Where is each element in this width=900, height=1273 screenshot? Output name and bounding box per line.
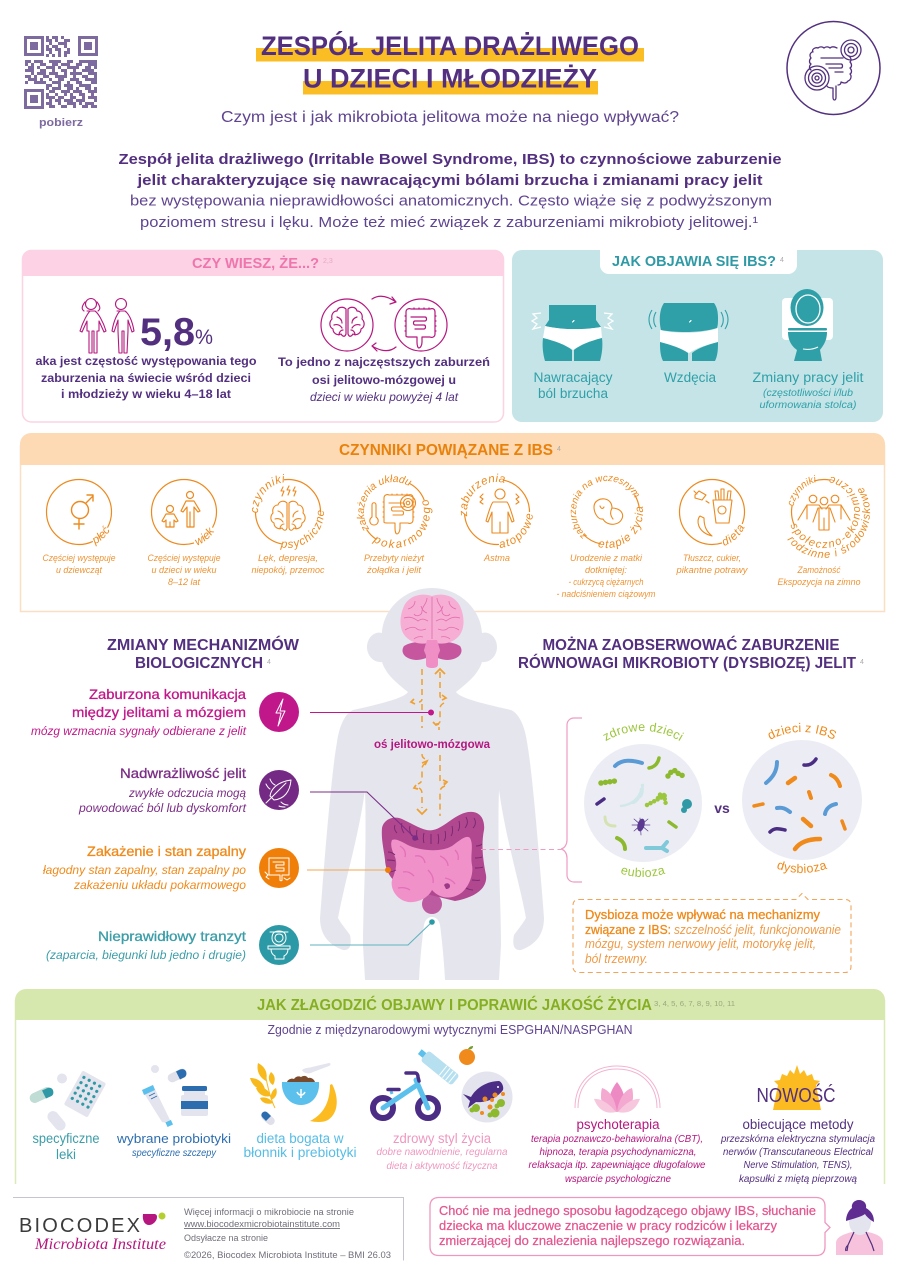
- item: psychotherapy: relaksacja itp. zapewniające długofalowe: [528, 1160, 706, 1171]
- statistic description: i młodzieży w wieku 4–18 lat: [61, 387, 231, 401]
- heading: dysbiosis: 4: [860, 659, 864, 666]
- mechanism: infection and inflammation: zakażeniu układu pokarmowego: [73, 880, 247, 892]
- factor captions: niepokój, przemoc: [252, 565, 325, 576]
- intro paragraph: [118, 151, 782, 231]
- factor: socio-economic: czynniki: [788, 474, 816, 506]
- factor: gastrointestinal infection: [356, 474, 432, 548]
- item: healthy lifestyle: dobre nawodnienie, regularna: [376, 1147, 508, 1158]
- item: specific drugs: specyficzne: [32, 1131, 100, 1146]
- closing callout: Choć nie ma jednego sposobu łagodzącego objawy IBS, słuchanie: [439, 1204, 816, 1218]
- heading: dysbiosis: [518, 636, 864, 672]
- mechanism: abnormal transit: [46, 919, 435, 965]
- factor: early life disturbances: etapie życia: [598, 506, 644, 550]
- mechanism: abnormal transit: (zaparcia, biegunki lub jedno i drugie): [46, 950, 246, 962]
- factor captions: - nadciśnieniem ciążowym: [556, 589, 656, 600]
- item: healthy lifestyle: [376, 1131, 508, 1172]
- title: U DZIECI I MŁODZIEŻY: [303, 64, 597, 94]
- factor captions: Urodzenie z matki: [570, 553, 643, 564]
- closing callout: dziecka ma kluczowe znaczenie w pracy rodziców i lekarzy: [439, 1219, 778, 1233]
- factor captions: Częściej występuje: [148, 553, 220, 564]
- title: ZESPÓŁ JELITA DRAŻLIWEGO: [261, 30, 639, 61]
- factor captions: Ekspozycja na zimno: [778, 577, 860, 588]
- factor captions: 8–12 lat: [168, 577, 200, 588]
- mechanism: visceral hypersensitivity: [78, 765, 418, 841]
- item: promising methods: Nerve Stimulation, TENS),: [744, 1160, 852, 1171]
- intro paragraph: bez występowania nieprawidłowości anatomicznych. Często wiąże się z podwyższonym: [130, 192, 772, 210]
- factor: psychological: [252, 474, 324, 550]
- symptom labels: Wzdęcia: [664, 370, 716, 385]
- mechanism: infection and inflammation: [43, 843, 391, 892]
- axis description: dzieci w wieku powyżej 4 lat: [310, 390, 459, 404]
- icon: toilet: [782, 289, 833, 361]
- item: promising methods: kapsułki z miętą pieprzową: [739, 1174, 857, 1185]
- icon: abdominal pain: [532, 305, 613, 361]
- factor: atopic disorders: zaburzenia: [460, 474, 505, 516]
- heading: biological mechanisms: [107, 636, 299, 672]
- bacteria dysbiosis: [754, 759, 845, 849]
- factor: atopic disorders: [460, 474, 533, 548]
- factor: age: wiek: [194, 527, 214, 546]
- factor captions: [42, 553, 860, 600]
- axis label: oś jelitowo-mózgowa: [374, 739, 491, 751]
- closing callout: zmierzającej do znalezienia najlepszego rozwiązania.: [439, 1234, 745, 1248]
- item: diet rich in fibre: błonnik i prebiotyki: [244, 1145, 356, 1160]
- symptom labels: ból brzucha: [538, 386, 608, 401]
- statistic description: zaburzenia na świecie wśród dzieci: [41, 371, 251, 385]
- panel heading: CZYNNIKI POWIĄZANE Z IBS: [339, 442, 553, 459]
- statistic 5,8%: 5,8: [140, 311, 195, 354]
- statistic 5,8%: %: [195, 326, 213, 349]
- factor: early life disturbances: zaburzenia na wczesnym: [570, 476, 639, 539]
- factor: age: [150, 478, 218, 546]
- footer info: [13, 1198, 404, 1260]
- logo: Biocodex: BIOCODEX: [19, 1215, 140, 1237]
- icon: doctor: [836, 1200, 883, 1255]
- dysbiosis callout: Dysbioza może wpływać na mechanizmy: [585, 908, 821, 922]
- item: psychotherapy: terapia poznawczo-behawioralna (CBT),: [531, 1134, 703, 1145]
- factor captions: Przebyty nieżyt: [364, 553, 424, 564]
- factor captions: dotkniętej:: [585, 565, 627, 576]
- footer text: www.biocodexmicrobiotainstitute.com: [183, 1219, 340, 1229]
- factor: gastrointestinal infection: pokarmowego: [372, 500, 432, 548]
- dysbiosis callout: szczelność jelit, funkcjonowanie: [674, 923, 841, 937]
- item: specific drugs: leki: [56, 1147, 76, 1162]
- mechanism: communication: między jelitami a mózgiem: [72, 704, 246, 720]
- mechanism: visceral hypersensitivity: Nadwrażliwość jelit: [120, 765, 246, 781]
- item: promising methods: przezskórna elektryczna stymulacja: [720, 1134, 875, 1145]
- mechanism: communication: mózg wzmacnia sygnały odbierane z jelit: [31, 726, 247, 738]
- panel heading: CZY WIESZ, ŻE...?: [192, 255, 319, 272]
- factor: diet: [678, 478, 746, 546]
- factor captions: u dziewcząt: [56, 565, 102, 576]
- panel: symptoms: [512, 250, 883, 422]
- item: promising methods: obiecujące metody: [742, 1117, 854, 1132]
- bracket: [561, 718, 582, 882]
- factor: psychological: czynniki: [252, 474, 284, 513]
- icon: diet: [250, 1063, 337, 1127]
- label: healthy children: zdrowe dzieci: [603, 722, 684, 741]
- intro paragraph: poziomem stresu i lęku. Może też mieć związek z zaburzeniami mikrobioty jelitowej.¹: [140, 214, 758, 231]
- item: healthy lifestyle: dieta i aktywność fizyczna: [386, 1161, 498, 1172]
- qr code: [25, 38, 97, 108]
- references: 3, 4, 5, 6, 7, 8, 9, 10, 11: [654, 1001, 735, 1008]
- factor: atopic disorders: atopowe: [500, 514, 533, 548]
- icon: brain: [400, 595, 464, 668]
- item: psychotherapy: wsparcie psychologiczne: [565, 1174, 671, 1185]
- footer text: Więcej informacji o mikrobiocie na stronie: [184, 1207, 354, 1217]
- panel: related factors: [20, 433, 886, 612]
- link from gut to microbiota: [481, 848, 561, 850]
- label: dysbiosis: dysbioza: [777, 861, 828, 874]
- factor captions: pikantne potrawy: [676, 565, 749, 576]
- statistic description: aka jest częstość występowania tego: [36, 354, 256, 368]
- item: promising methods: nerwów (Transcutaneous Electrical: [723, 1147, 874, 1158]
- factor captions: Zamożność: [797, 565, 841, 576]
- icon: two children: [80, 298, 134, 353]
- title: [256, 30, 644, 94]
- item: healthy lifestyle: zdrowy styl życia: [393, 1131, 491, 1146]
- factor: psychological: psychiczne: [280, 510, 324, 550]
- axis description: osi jelitowo-mózgowej u: [312, 373, 456, 387]
- icon: intestine with pain circles: [787, 22, 880, 114]
- vs: vs: [714, 800, 730, 816]
- dysbiosis callout: związane z IBS:: [585, 923, 671, 937]
- mechanism: visceral hypersensitivity: zwykłe odczucia mogą: [128, 788, 246, 800]
- gut-brain axis arrows: [411, 669, 447, 816]
- mechanism: abnormal transit: Nieprawidłowy tranzyt: [98, 928, 246, 944]
- closing callout: [430, 1198, 830, 1256]
- factor: diet: dieta: [722, 525, 744, 546]
- heading: biological mechanisms: BIOLOGICZNYCH: [135, 655, 263, 672]
- guidelines note: Zgodnie z międzynarodowymi wytycznymi ESPGHAN/NASPGHAN: [268, 1023, 632, 1037]
- icon: pills: [28, 1070, 106, 1133]
- dysbiosis callout: [573, 894, 851, 972]
- factor captions: Tłuszcz, cukier,: [683, 553, 741, 564]
- axis description: To jedno z najczęstszych zaburzeń: [278, 355, 490, 369]
- mechanism: infection and inflammation: Zakażenie i stan zapalny: [87, 843, 246, 859]
- dysbiosis callout: mózgu, system nerwowy jelit, motorykę jelit,: [585, 937, 816, 951]
- factor captions: Astma: [483, 553, 510, 564]
- intro paragraph: jelit charakteryzujące się nawracającymi bólami brzucha i zmianami pracy jelit: [136, 172, 763, 189]
- item: promising methods: [720, 1117, 875, 1185]
- statistic description: [36, 354, 256, 401]
- label: eubiosis: eubioza: [621, 868, 666, 877]
- footer text: [183, 1207, 391, 1260]
- item: diet rich in fibre: [244, 1131, 356, 1160]
- footer text: Odsyłacze na stronie: [184, 1233, 268, 1243]
- item: selected probiotics: specyficzne szczepy: [132, 1148, 217, 1159]
- icon: probiotics: [142, 1065, 208, 1127]
- symptom labels: uformowania stolca): [760, 400, 856, 411]
- panel: did you know: [22, 250, 504, 422]
- icon: bicycle, bottle and plate: [373, 1046, 512, 1122]
- bacteria healthy: [597, 758, 692, 851]
- intro paragraph: Zespół jelita drażliwego (Irritable Bowel Syndrome, IBS) to czynnościowe zaburzenie: [118, 151, 782, 168]
- heading: dysbiosis: RÓWNOWAGI MIKROBIOTY (DYSBIOZĘ) JELIT: [518, 654, 857, 672]
- symptom labels: [534, 370, 864, 411]
- axis description: [278, 355, 490, 404]
- factor: sex: [46, 478, 112, 546]
- item: selected probiotics: [116, 1131, 231, 1159]
- item: diet rich in fibre: dieta bogata w: [256, 1131, 344, 1146]
- reference: 4: [557, 446, 561, 453]
- item: psychotherapy: psychoterapia: [576, 1117, 660, 1132]
- dysbiosis callout: ból trzewny.: [585, 952, 648, 966]
- microbiota: children with IBS: [742, 722, 862, 874]
- icon: new badge: [756, 1065, 836, 1110]
- icon: gut-brain axis cycle: [321, 296, 447, 351]
- body silhouette: [320, 588, 544, 980]
- symptom labels: Nawracający: [534, 370, 613, 385]
- factor captions: żołądka i jelit: [366, 565, 421, 576]
- qr label: pobierz: [39, 117, 84, 129]
- factor: socio-economic: rodzinne i środowiskowe: [787, 488, 870, 558]
- heading: dysbiosis: MOŻNA ZAOBSERWOWAĆ ZABURZENIE: [542, 636, 840, 654]
- item: psychotherapy: hipnoza, terapia psychodynamiczna,: [540, 1147, 696, 1158]
- item: psychotherapy: [528, 1117, 706, 1185]
- factor captions: Częściej występuje: [42, 553, 116, 564]
- factor: socio-economic: społeczno-ekonomiczne: [790, 477, 860, 548]
- mechanism: communication: [31, 686, 434, 738]
- heading: biological mechanisms: 4: [267, 659, 271, 666]
- footer text: ©2026, Biocodex Microbiota Institute – BMI 26.03: [184, 1250, 391, 1260]
- logo: Biocodex: Microbiota Institute: [34, 1236, 166, 1253]
- factor: sex: płeć: [93, 525, 110, 546]
- reference: 4: [780, 257, 784, 264]
- mechanism: infection and inflammation: łagodny stan zapalny, stan zapalny po: [43, 865, 247, 877]
- references: 2,3: [323, 258, 333, 265]
- label: children with IBS: dzieci z IBS: [768, 722, 836, 739]
- logo: Biocodex: [19, 1212, 166, 1253]
- heading: biological mechanisms: ZMIANY MECHANIZMÓW: [107, 636, 299, 654]
- mechanism: visceral hypersensitivity: powodować ból lub dyskomfort: [78, 803, 247, 815]
- icon: bloating: [649, 303, 728, 361]
- panel heading: JAK OBJAWIA SIĘ IBS?: [612, 253, 776, 270]
- subtitle: Czym jest i jak mikrobiota jelitowa może na niego wpływać?: [221, 109, 679, 126]
- item: selected probiotics: wybrane probiotyki: [116, 1131, 231, 1146]
- factor captions: u dzieci w wieku: [152, 565, 217, 576]
- icon: lotus: [575, 1066, 660, 1113]
- panel: how to relieve symptoms: [15, 989, 885, 1185]
- panel heading: JAK ZŁAGODZIĆ OBJAWY I POPRAWIĆ JAKOŚĆ ŻYCIA: [257, 996, 652, 1014]
- icon: new badge: NOWOŚĆ: [756, 1083, 836, 1107]
- factor captions: Lęk, depresja,: [258, 553, 318, 564]
- symptom labels: Zmiany pracy jelit: [752, 370, 864, 385]
- microbiota: healthy children: [584, 722, 702, 877]
- factor captions: - cukrzycą ciężarnych: [568, 577, 644, 588]
- factor: gastrointestinal infection: zakażenia układu: [356, 474, 412, 531]
- icon: intestines: [382, 812, 486, 914]
- mechanism: communication: Zaburzona komunikacja: [89, 686, 246, 702]
- symptom labels: (częstotliwości i/lub: [763, 388, 853, 399]
- item: specific drugs: [32, 1131, 100, 1162]
